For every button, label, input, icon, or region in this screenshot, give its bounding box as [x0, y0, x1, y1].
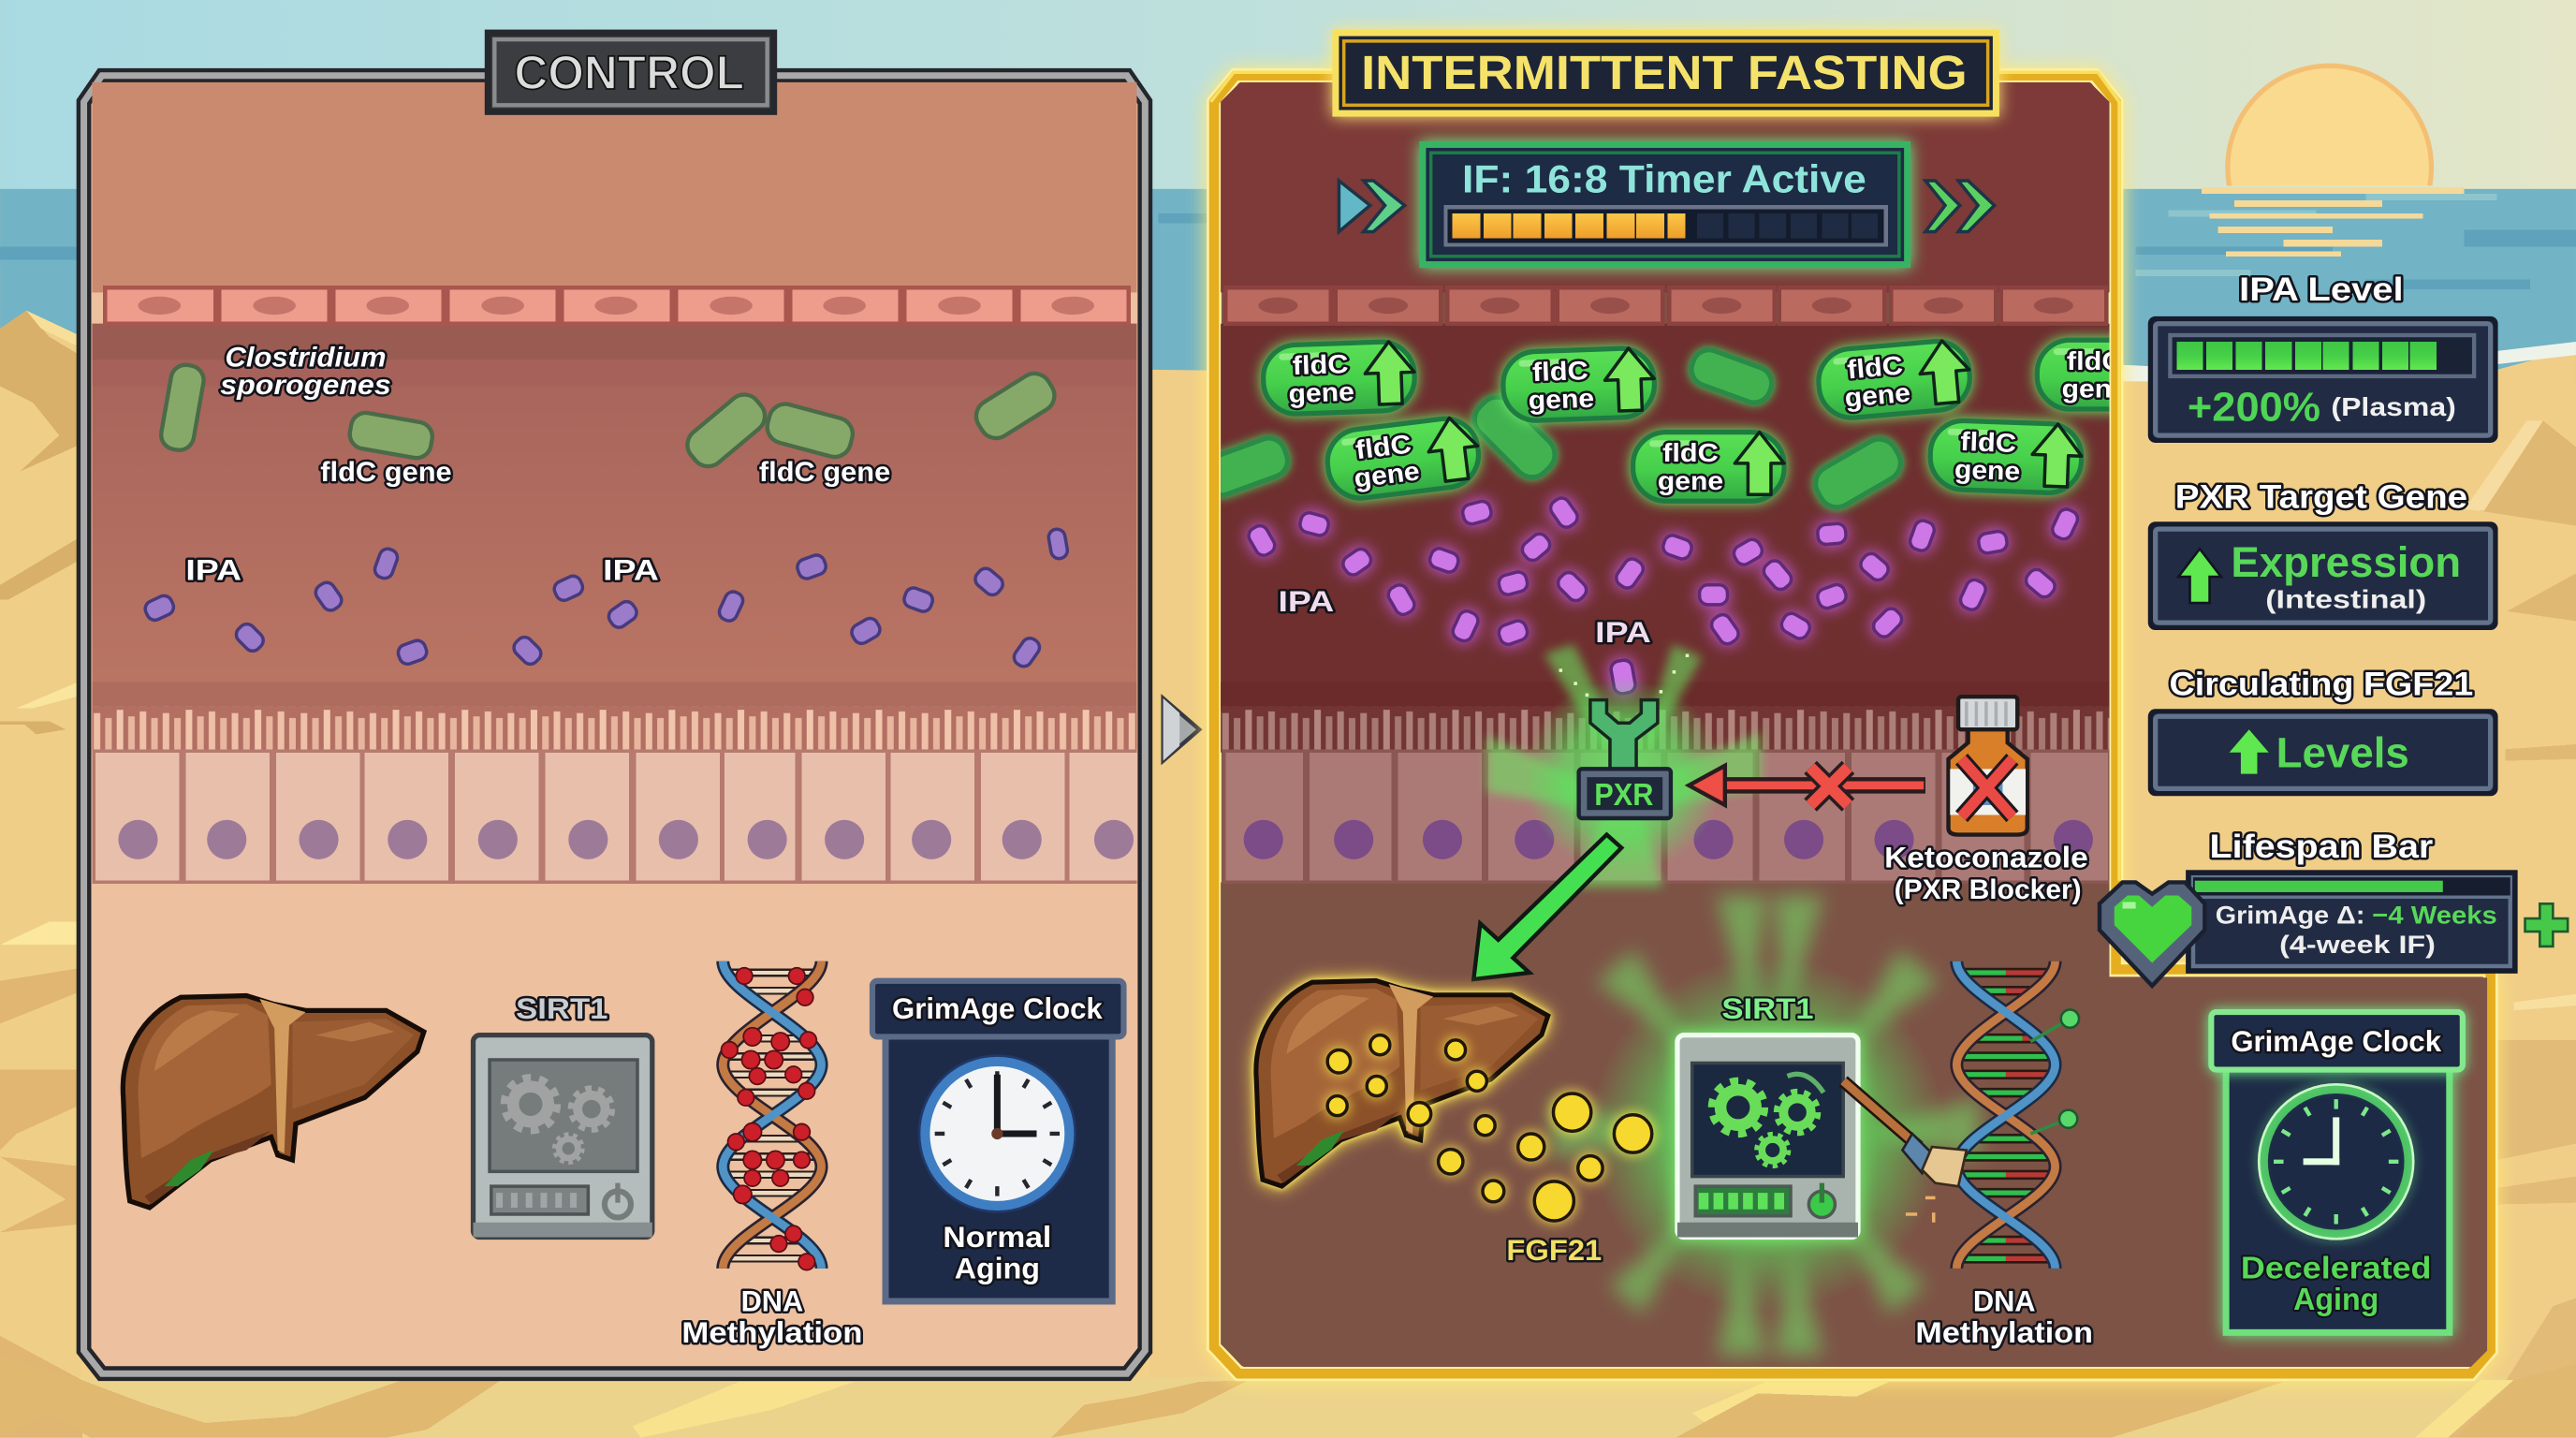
- icon: left chevrons: [1339, 181, 1405, 231]
- sidebar label: PXR target gene: PXR Target Gene: [2175, 478, 2467, 515]
- icon: active DNA helix: [1956, 961, 2079, 1269]
- bacteria: Clostridium sporogenes: [159, 362, 1061, 473]
- panel: control: [84, 76, 1155, 1373]
- sidebar panel: IPA level: [2150, 318, 2496, 440]
- icon: brush: [1843, 1081, 1967, 1223]
- lower epithelium cells: [1224, 751, 2110, 882]
- text: fldC gene right: fldC gene: [759, 457, 890, 488]
- upper epithelium cells: [1225, 287, 2106, 324]
- clock face: [2259, 1084, 2413, 1239]
- IPA particles: [142, 528, 1069, 669]
- label: ketoconazole: Ketoconazole: [1884, 841, 2088, 874]
- left dunes: [0, 311, 82, 1438]
- sidebar panel: lifespan: GrimAge Δ:: [2216, 900, 2364, 929]
- bottom dunes: [0, 1356, 2576, 1438]
- text: IPA left: IPA: [185, 553, 242, 587]
- lower epithelium cells: [94, 751, 1155, 882]
- text: IPA centre: IPA: [603, 553, 659, 587]
- panel: GrimAge clock fasting: [2211, 1012, 2463, 1332]
- fldC gene pills: gene: [1954, 455, 2021, 486]
- text: IPA near receptor: IPA: [1595, 615, 1651, 649]
- panel: GrimAge clock fasting: GrimAge Clock: [2231, 1024, 2441, 1058]
- label: SIRT1 control: SIRT1: [516, 991, 607, 1025]
- sidebar panel: PXR target gene: [2150, 524, 2496, 627]
- panel: GrimAge clock control: [872, 981, 1123, 1301]
- icon: control SIRT1 device: [474, 1035, 652, 1238]
- sidebar panel: IPA level: +200%: [2188, 384, 2320, 430]
- sidebar label: lifespan bar: Lifespan Bar: [2210, 829, 2434, 865]
- icon: plus: [2525, 903, 2568, 946]
- microvilli: [92, 707, 1137, 753]
- text: Clostridium sporogenes: [220, 342, 391, 401]
- arrow: ketoconazole blocked: [1689, 766, 1925, 805]
- icon: control DNA helix: [722, 961, 822, 1270]
- sidebar panel: lifespan: [2188, 873, 2515, 971]
- icon: right chevrons: [1925, 181, 1995, 231]
- microvilli: [1221, 707, 2110, 753]
- fldC gene pills: fldC: [1531, 356, 1588, 387]
- panel: intermittent fasting: [1198, 72, 2494, 1375]
- label: DNA methylation control: [681, 1284, 862, 1349]
- progress bar: [1445, 207, 1886, 244]
- fldC gene pills: fldC: [1846, 350, 1904, 384]
- heading: intermittent fasting: INTERMITTENT FASTING: [1361, 46, 1968, 99]
- IPA particles glowing: [1246, 495, 2080, 695]
- gut lumen: [92, 324, 1137, 712]
- upper epithelium cells: [105, 287, 1129, 324]
- label: DNA methylation fasting: DNA: [1973, 1284, 2036, 1318]
- timer panel: IF: 16:8 Timer Active: [1462, 156, 1866, 200]
- fldC gene pills: fldC: [1292, 349, 1349, 380]
- panel: GrimAge clock control: Normal: [943, 1220, 1051, 1254]
- fldC gene pills: gene: [1843, 378, 1911, 413]
- text: Clostridium sporogenes: sporogenes: [220, 370, 391, 401]
- fldC gene pills: gene: [1528, 384, 1594, 415]
- panel: GrimAge clock fasting: Aging: [2293, 1283, 2378, 1317]
- text: fldC gene left: fldC gene: [320, 457, 452, 488]
- panel: GrimAge clock control: GrimAge Clock: [892, 991, 1103, 1025]
- sidebar label: IPA level: IPA Level: [2239, 271, 2404, 308]
- FGF21 particles: [1327, 1035, 1652, 1221]
- icon: control liver: [123, 996, 424, 1208]
- icon: PXR receptor: [1579, 700, 1671, 818]
- label: DNA methylation control: DNA: [741, 1284, 803, 1318]
- label: ketoconazole: (PXR Blocker): [1895, 874, 2082, 905]
- arrow: control to fasting: [1164, 698, 1199, 761]
- sun reflection: [2202, 187, 2465, 257]
- icon: active SIRT1 device: [1677, 1035, 1858, 1238]
- text: IPA left fasting: IPA: [1278, 584, 1334, 618]
- sidebar panel: lifespan: (4-week IF): [2279, 930, 2436, 959]
- fldC gene pills: gene: [2062, 374, 2128, 404]
- fldC gene pills: gene: [1288, 377, 1354, 408]
- panel: GrimAge clock control: Aging: [955, 1251, 1040, 1284]
- sidebar panel: IPA level: (Plasma): [2331, 392, 2456, 421]
- heading: control: [488, 33, 774, 111]
- icon: PXR receptor: PXR: [1594, 778, 1653, 813]
- label: ketoconazole: [1884, 841, 2088, 905]
- panel: GrimAge clock fasting: Decelerated: [2241, 1251, 2431, 1285]
- sidebar panel: lifespan: −4 Weeks: [2372, 900, 2497, 929]
- sidebar label: circulating FGF21: Circulating FGF21: [2170, 666, 2473, 702]
- sun: [2225, 64, 2434, 185]
- sidebar panel: circulating FGF21: Levels: [2276, 729, 2409, 777]
- fldC gene pills: [1262, 339, 2188, 502]
- label: SIRT1 active: SIRT1: [1721, 991, 1814, 1025]
- icon: fasting liver: [1256, 980, 1548, 1186]
- sand: [0, 311, 82, 1438]
- text: Clostridium sporogenes: Clostridium: [225, 342, 386, 373]
- heading: control: CONTROL: [514, 46, 744, 99]
- fldC gene pills: gene: [1353, 456, 1421, 493]
- sidebar panel: PXR target gene: (Intestinal): [2265, 584, 2426, 613]
- fldC gene pills: fldC: [1354, 429, 1412, 464]
- lumen wall: [92, 82, 1137, 292]
- fldC gene pills: fldC: [1960, 427, 2017, 458]
- label: DNA methylation fasting: Methylation: [1915, 1315, 2093, 1349]
- label: DNA methylation fasting: [1915, 1284, 2093, 1349]
- timer panel: [1423, 144, 1908, 265]
- heading: intermittent fasting: [1336, 33, 1996, 113]
- PXR glow: [1486, 644, 1761, 888]
- icon: heart: [2100, 882, 2204, 986]
- label: FGF21: FGF21: [1506, 1233, 1602, 1267]
- right dunes: [2448, 420, 2576, 1438]
- sidebar panel: PXR target gene: Expression: [2231, 538, 2461, 586]
- sidebar panel: circulating FGF21: [2150, 712, 2496, 794]
- clock face: [919, 1056, 1076, 1211]
- arrow: PXR to liver: [1473, 835, 1621, 979]
- small bacteria: [1198, 345, 1907, 514]
- fldC gene pills: fldC: [2067, 346, 2123, 375]
- SIRT1 glow rays: [1553, 895, 1980, 1356]
- icon: ketoconazole bottle: [1949, 697, 2027, 835]
- label: DNA methylation control: Methylation: [681, 1315, 862, 1349]
- fldC gene pills: gene: [1658, 466, 1723, 495]
- fldC gene pills: fldC: [1662, 438, 1719, 467]
